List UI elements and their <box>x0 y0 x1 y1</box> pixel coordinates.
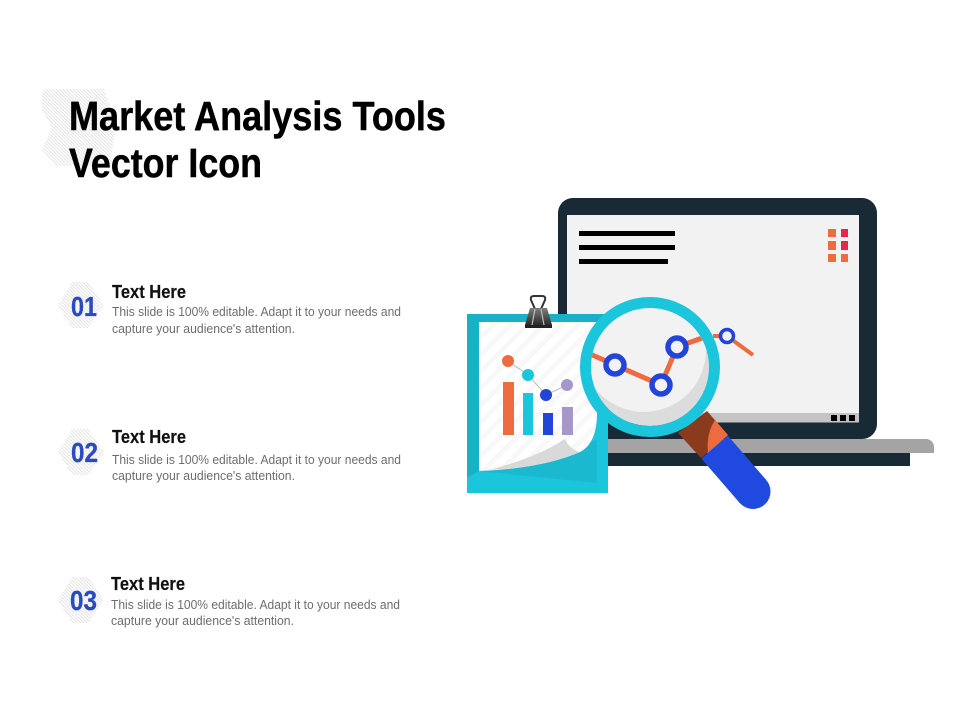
title: Market Analysis Tools <box>69 93 446 139</box>
number badge 02: 02 <box>71 437 98 468</box>
item 03 <box>58 573 400 628</box>
item 02 <box>58 426 401 483</box>
paper sheet <box>479 322 597 471</box>
number badge 02 <box>58 429 104 475</box>
number badge 01: 01 <box>71 291 97 322</box>
title backdrop hatch <box>42 89 116 166</box>
title <box>69 93 446 186</box>
number badge 01 <box>58 282 104 328</box>
dot line chart <box>502 355 573 401</box>
number badge 03 <box>58 577 104 623</box>
heading 02: Text Here <box>112 426 186 447</box>
title: Vector Icon <box>69 140 262 186</box>
icon: binder clip <box>525 296 552 328</box>
heading 03: Text Here <box>111 573 185 594</box>
panel: clipboard report <box>467 296 608 493</box>
line chart on screen <box>713 330 753 355</box>
description 01: capture your audience's attention. <box>112 321 295 336</box>
description 01 <box>112 304 401 336</box>
icon: magnifying glass lens <box>582 288 714 432</box>
description 03: This slide is 100% editable. Adapt it to your needs and <box>111 597 400 612</box>
icon: magnifying glass handle <box>678 411 770 509</box>
description 02: capture your audience's attention. <box>112 468 295 483</box>
illustration: market analysis icon <box>467 198 934 509</box>
heading 01: Text Here <box>112 281 186 302</box>
number badge 03: 03 <box>70 585 97 616</box>
magnified line chart <box>590 337 705 394</box>
page curl <box>488 439 580 470</box>
icon: laptop <box>558 198 934 466</box>
item 01 <box>58 281 401 336</box>
description 01: This slide is 100% editable. Adapt it to your needs and <box>112 304 401 319</box>
description 03: capture your audience's attention. <box>111 613 294 628</box>
description 02: This slide is 100% editable. Adapt it to your needs and <box>112 452 401 467</box>
description 03 <box>111 597 400 628</box>
description 02 <box>112 452 401 483</box>
bar chart <box>503 382 573 435</box>
